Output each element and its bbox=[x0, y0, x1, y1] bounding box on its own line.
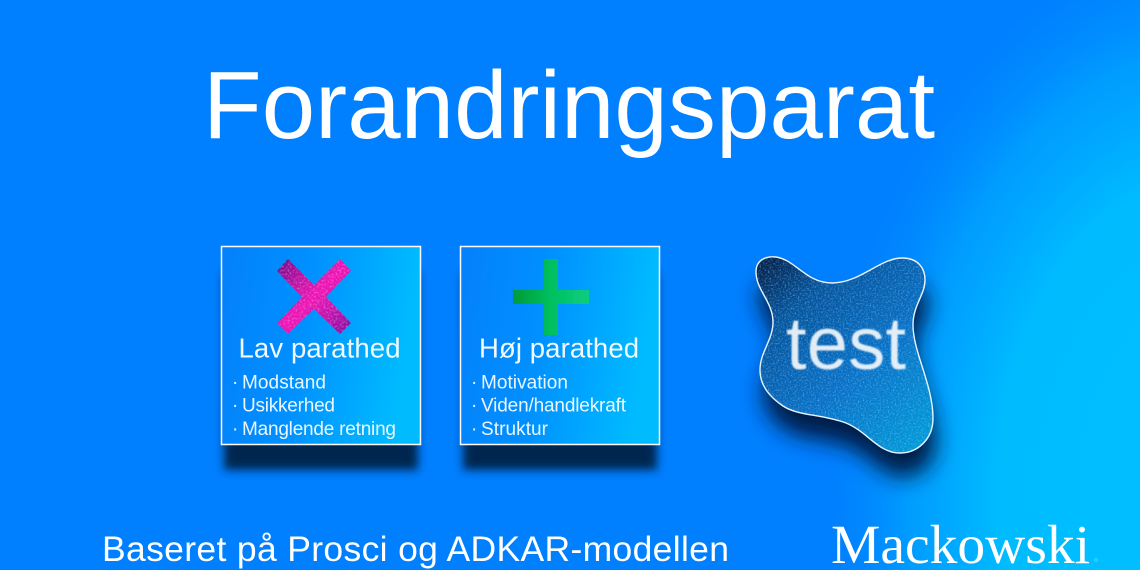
list: high readiness: Motivation bbox=[481, 372, 568, 394]
list: high readiness: · bbox=[471, 396, 477, 416]
list: low readiness: · bbox=[232, 372, 238, 394]
list: low readiness: · bbox=[232, 419, 238, 440]
list: high readiness: · bbox=[471, 419, 477, 440]
list: low readiness: Manglende retning bbox=[242, 419, 396, 440]
list: high readiness: · bbox=[471, 372, 477, 394]
list: high readiness: Viden/handlekraft bbox=[481, 396, 627, 416]
list: low readiness: Usikkerhed bbox=[242, 396, 335, 416]
blob label: test bbox=[786, 302, 906, 385]
list: low readiness: Modstand bbox=[242, 372, 326, 394]
panel: high readiness bbox=[460, 246, 660, 470]
list: high readiness bbox=[471, 372, 627, 440]
test blob bbox=[750, 250, 940, 477]
panel: low readiness bbox=[222, 246, 420, 470]
title: Forandringsparat bbox=[203, 52, 935, 159]
heading: high readiness: Høj parathed bbox=[479, 332, 639, 364]
footer: source text: Baseret på Prosci og ADKAR-modellen bbox=[102, 529, 729, 569]
list: low readiness bbox=[232, 372, 396, 440]
heading: low readiness: Lav parathed bbox=[238, 332, 400, 364]
icon: green plus bbox=[513, 259, 589, 335]
icon: magenta cross bbox=[275, 257, 353, 336]
list: high readiness: Struktur bbox=[481, 419, 549, 440]
list: low readiness: · bbox=[232, 396, 238, 416]
